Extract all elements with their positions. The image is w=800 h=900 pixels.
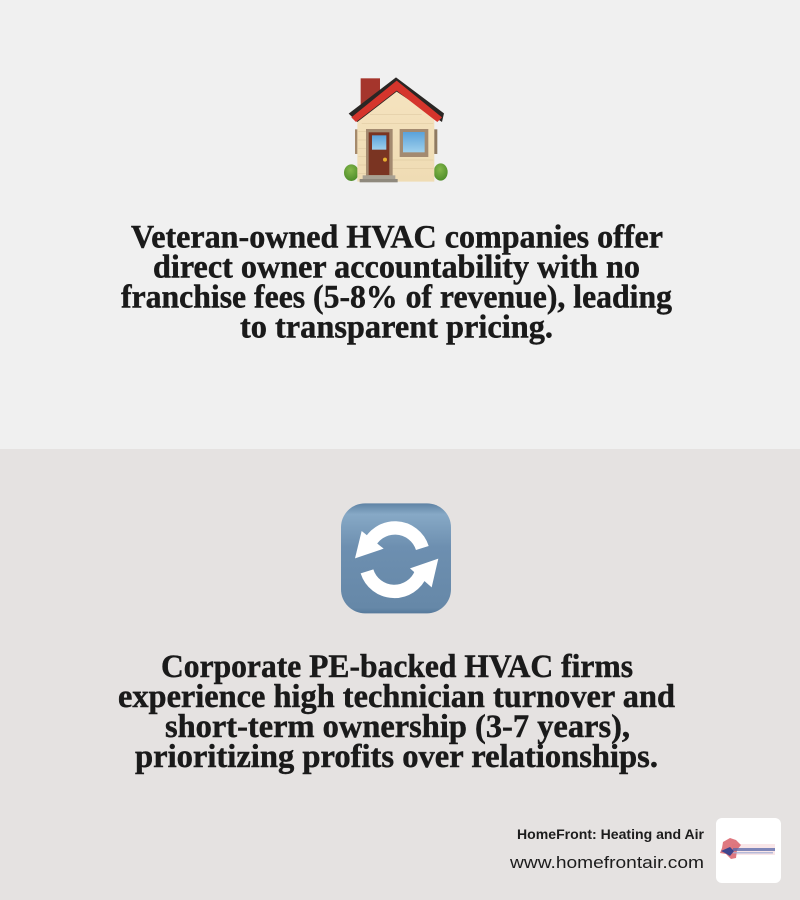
heading: veteran-owned statement: direct owner accountability with no	[153, 250, 640, 286]
website: www.homefrontair.com	[509, 853, 704, 872]
heading: corporate statement	[118, 649, 675, 775]
brand name: HomeFront: Heating and Air	[517, 826, 705, 842]
heading: corporate statement: Corporate PE-backed HVAC firms	[161, 649, 633, 685]
heading: corporate statement: experience high technician turnover and	[118, 679, 675, 715]
heading: veteran-owned statement: franchise fees (5-8% of revenue), leading	[121, 280, 672, 316]
panel: corporate PE-backed	[0, 449, 800, 900]
icon: house	[344, 77, 448, 182]
heading: veteran-owned statement	[121, 220, 672, 346]
heading: veteran-owned statement: Veteran-owned HVAC companies offer	[131, 220, 663, 256]
icon: refresh arrows	[341, 503, 451, 613]
heading: corporate statement: prioritizing profits over relationships.	[135, 739, 658, 775]
heading: veteran-owned statement: to transparent pricing.	[240, 310, 553, 346]
panel: veteran-owned	[0, 0, 800, 449]
logo	[716, 818, 781, 883]
heading: corporate statement: short-term ownership (3-7 years),	[165, 709, 630, 745]
